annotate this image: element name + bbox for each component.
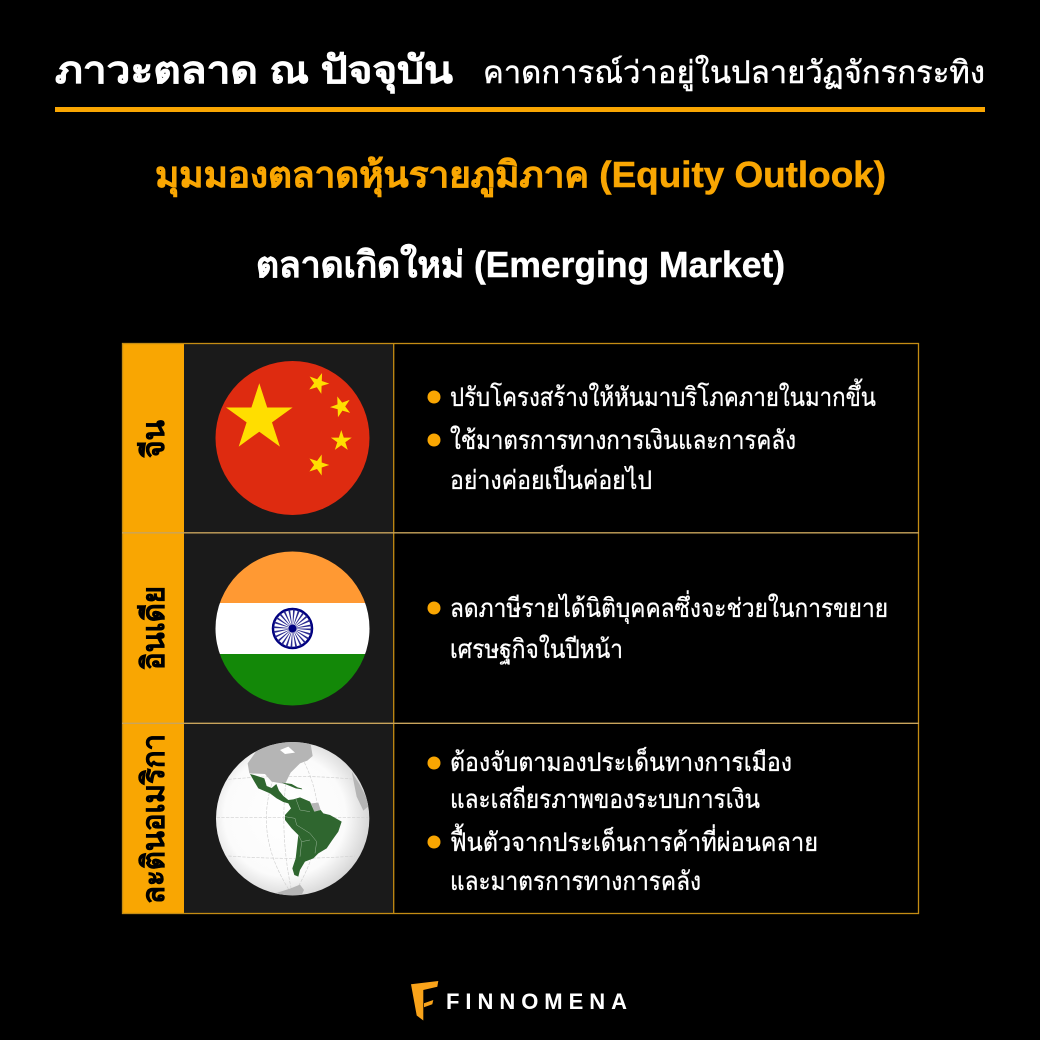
Latin America bullet 1 xyxy=(428,746,792,814)
header rule xyxy=(55,107,985,112)
China bullet 1: ปรับโครงสร้างให้หันมาบริโภคภายในมากขึ้น xyxy=(450,378,876,412)
India bullet: ลดภาษีรายได้นิติบุคคลซึ่งจะช่วยในการขยาย xyxy=(450,590,888,624)
India bullet xyxy=(428,590,888,665)
Latin America bullet 2: และมาตรการทางการคลัง xyxy=(450,866,701,896)
row label: India: อินเดีย xyxy=(136,586,171,670)
Latin America bullet 1: ต้องจับตามองประเด็นทางการเมือง xyxy=(450,746,792,777)
Latin America bullet 2: ฟื้นตัวจากประเด็นการค้าที่ผ่อนคลาย xyxy=(450,823,818,857)
wordmark: FINNOMENA xyxy=(446,989,627,1014)
icon: F mark xyxy=(411,981,438,1020)
icon: China flag xyxy=(215,360,370,516)
sub heading: ตลาดเกิดใหม่ (Emerging Market) xyxy=(256,243,785,285)
icon: India flag xyxy=(215,551,370,706)
India bullet: เศรษฐกิจในปีหน้า xyxy=(450,634,623,665)
China bullet 2: ใช้มาตรการทางการเงินและการคลัง xyxy=(450,425,796,455)
header subtitle: คาดการณ์ว่าอยู่ในปลายวัฏจักรกระทิง xyxy=(483,55,985,91)
label column background xyxy=(122,343,184,914)
header title: ภาวะตลาด ณ ปัจจุบัน xyxy=(55,50,453,94)
table outline xyxy=(122,344,918,914)
China bullet 2: อย่างค่อยเป็นค่อยไป xyxy=(450,464,652,495)
Latin America bullet 1: และเสถียรภาพของระบบการเงิน xyxy=(450,784,760,814)
logo: FINNOMENA xyxy=(411,981,627,1020)
table xyxy=(122,343,919,914)
section heading: มุมมองตลาดหุ้นรายภูมิภาค (Equity Outlook) xyxy=(155,154,886,198)
row label: China: จีน xyxy=(136,420,171,458)
China bullet 2 xyxy=(428,425,796,495)
flag column background xyxy=(184,343,393,914)
Latin America bullet 2 xyxy=(428,823,818,896)
icon: Latin America globe xyxy=(216,740,370,898)
row label: Latin America: ละตินอเมริกา xyxy=(136,734,171,904)
